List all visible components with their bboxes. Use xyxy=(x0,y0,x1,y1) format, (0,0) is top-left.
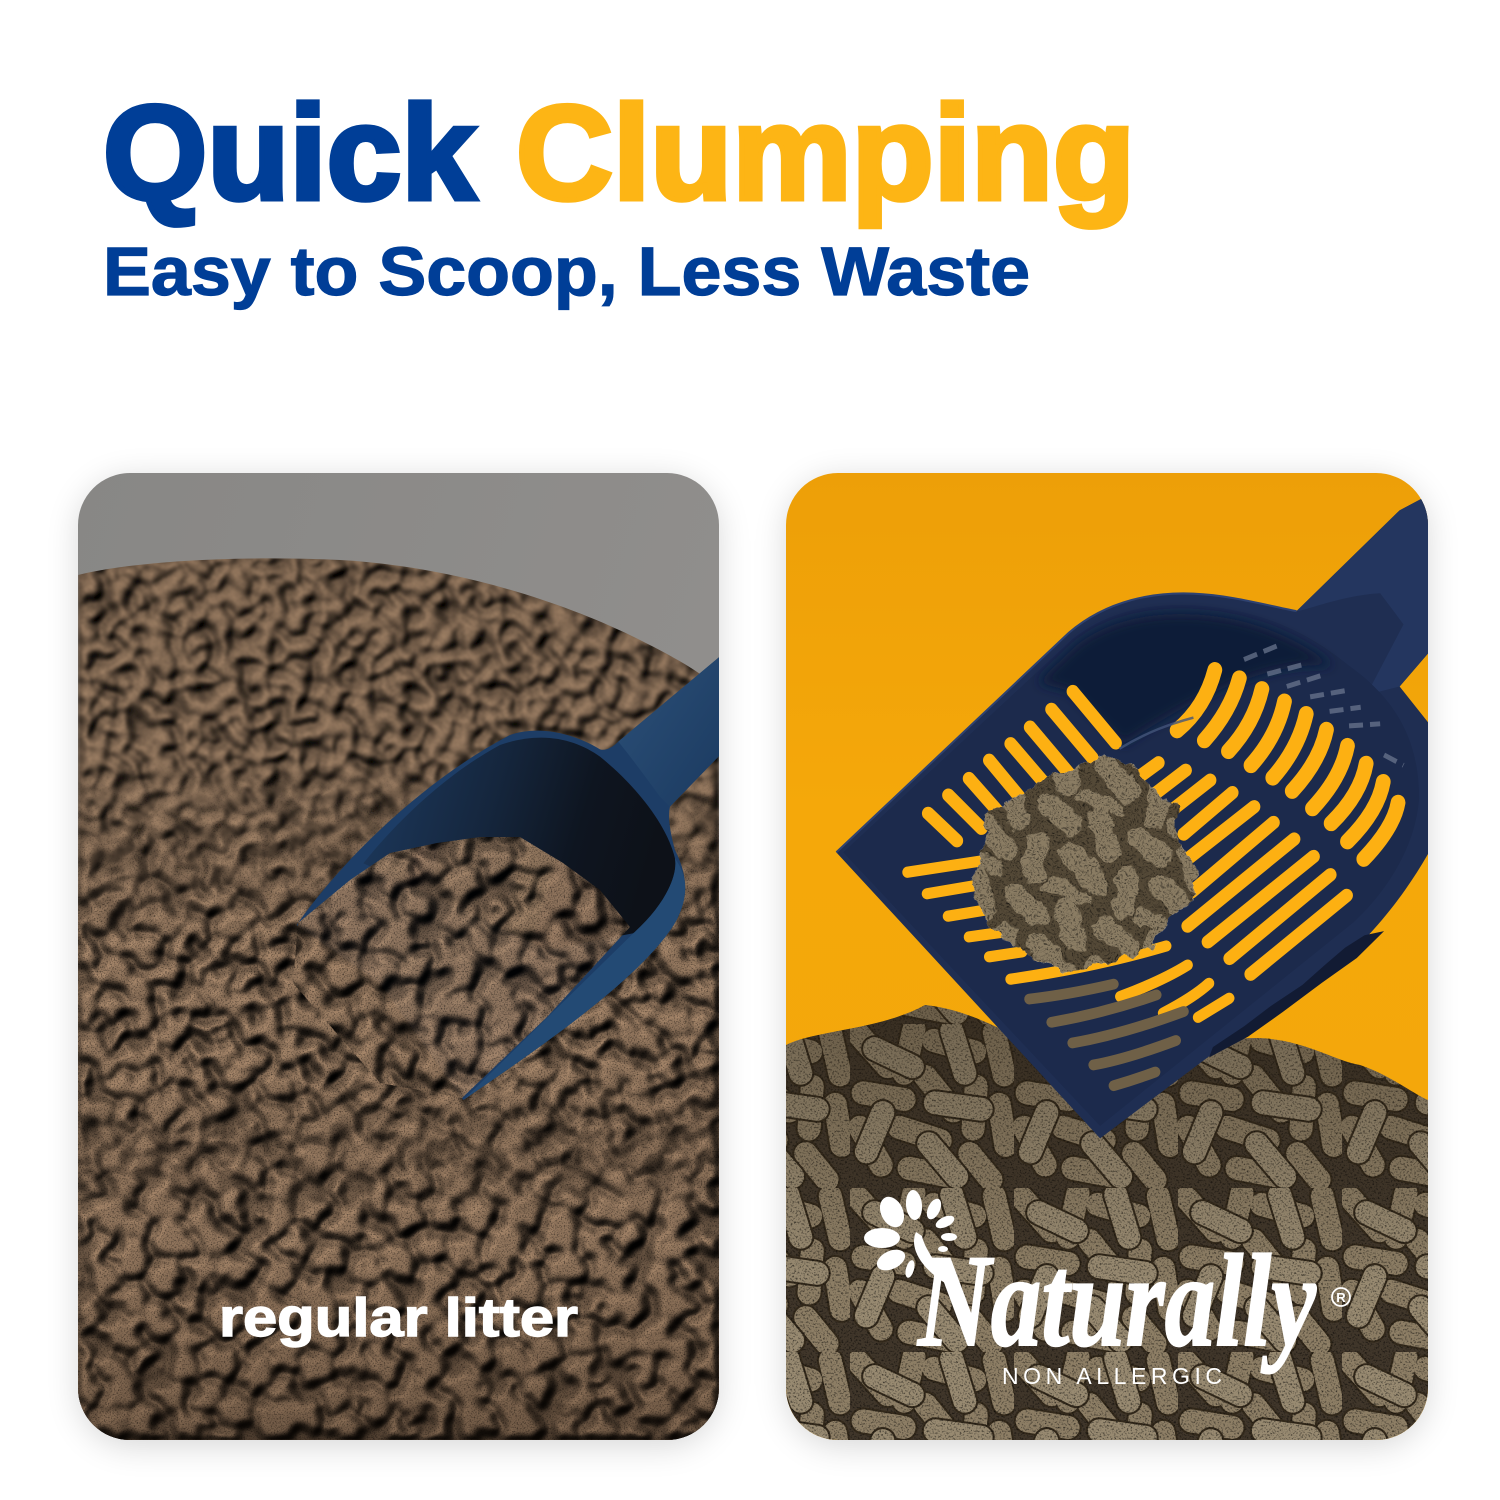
naturally logo xyxy=(864,1189,1350,1389)
title: Quick: Quick xyxy=(103,79,476,228)
ridged underside xyxy=(1209,931,1384,1058)
rim highlight xyxy=(836,593,1297,852)
dark blue sifter scoop xyxy=(836,488,1442,1138)
slots: showing pellets xyxy=(1029,984,1184,1086)
slots: left row xyxy=(928,691,1116,841)
highlights xyxy=(1244,645,1404,765)
scoop body xyxy=(836,488,1442,1138)
icon: leaves xyxy=(864,1189,957,1286)
litter in scoop xyxy=(293,837,630,1098)
registered mark: R xyxy=(1336,1290,1346,1305)
litter pile xyxy=(78,555,719,1440)
tagline: NON ALLERGIC xyxy=(1002,1363,1222,1389)
title: Clumping: Clumping xyxy=(516,79,1135,228)
slots: long diagonal xyxy=(1141,763,1347,974)
slots: curved top right xyxy=(1177,670,1398,859)
pellet pile xyxy=(786,1000,1428,1440)
wordmark: Naturally xyxy=(916,1227,1316,1374)
panel: naturally xyxy=(786,473,1442,1440)
title xyxy=(103,79,1135,228)
panel shadows xyxy=(80,480,1426,1445)
subtitle: Easy to Scoop, Less Waste xyxy=(103,233,1030,310)
registered mark xyxy=(1332,1288,1350,1306)
panel: regular litter xyxy=(78,473,722,1440)
slots: lower curved xyxy=(908,861,1229,1017)
litter clump xyxy=(972,756,1198,972)
label: regular litter: regular litter xyxy=(219,1288,578,1348)
blue scoop xyxy=(297,655,722,1100)
